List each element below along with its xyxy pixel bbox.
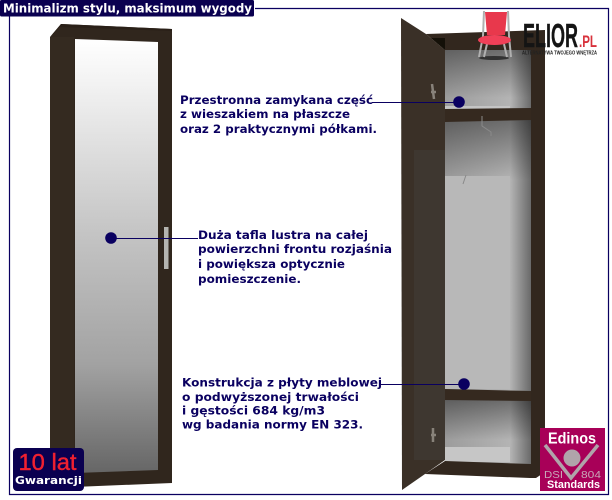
cabinet floor [425, 461, 536, 478]
title bar: Minimalizm stylu, maksimum wygody [3, 2, 252, 16]
badge: Edinos standards [540, 428, 605, 491]
door handle [164, 227, 168, 269]
callout text: oraz 2 praktycznymi półkami. [180, 122, 377, 136]
hanger rail hook [463, 116, 491, 184]
callout text: z wieszakiem na płaszcze [180, 107, 350, 121]
closed wardrobe with mirror [50, 24, 172, 488]
door hinges [431, 84, 436, 442]
callout text: powierzchni frontu rozjaśnia [198, 242, 392, 256]
callout: mirror [105, 228, 396, 286]
badge: 10 year warranty [13, 448, 84, 491]
callout: construction [182, 376, 470, 432]
callout text: i powiększa optycznie [198, 257, 345, 271]
mirror panel [75, 39, 158, 473]
callout text: o podwyższonej trwałości [182, 390, 359, 404]
logo: Elior.pl [478, 11, 597, 60]
interior back wall [445, 48, 532, 464]
badge: 10 year warranty: Gwarancji [15, 474, 82, 487]
badge: Edinos standards: DSI [544, 469, 563, 481]
pointer line [372, 102, 458, 104]
callout text: Konstrukcja z płyty meblowej [182, 376, 382, 390]
callout text: pomieszczenie. [198, 272, 301, 286]
pointer dot [105, 232, 117, 244]
lower shelf [445, 389, 531, 401]
callout text: Duża tafla lustra na całej [198, 228, 368, 242]
badge: 10 year warranty: 10 lat [18, 449, 77, 475]
light wall patches [445, 176, 510, 389]
wardrobe body [50, 24, 172, 488]
upper shelf [445, 108, 531, 122]
callout: closed compartment [180, 93, 465, 136]
callout text: Przestronna zamykana część [180, 93, 373, 107]
icon: red chair [478, 11, 511, 60]
pointer line [381, 384, 464, 386]
open wardrobe [401, 18, 545, 490]
logo: Elior.pl: .PL [579, 32, 597, 51]
pointer dot [453, 96, 465, 108]
badge: Edinos standards: 804 [581, 469, 601, 481]
pointer dot [458, 378, 470, 390]
badge: Edinos standards: Standards [547, 479, 600, 491]
callout text: wg badania normy EN 323. [182, 418, 363, 432]
callout text: i gęstości 684 kg/m3 [182, 404, 325, 418]
badge: Edinos standards: Edinos [548, 430, 596, 448]
pointer line [111, 238, 198, 240]
right side panel [531, 30, 545, 478]
open door [401, 18, 445, 490]
top panel [426, 30, 545, 50]
